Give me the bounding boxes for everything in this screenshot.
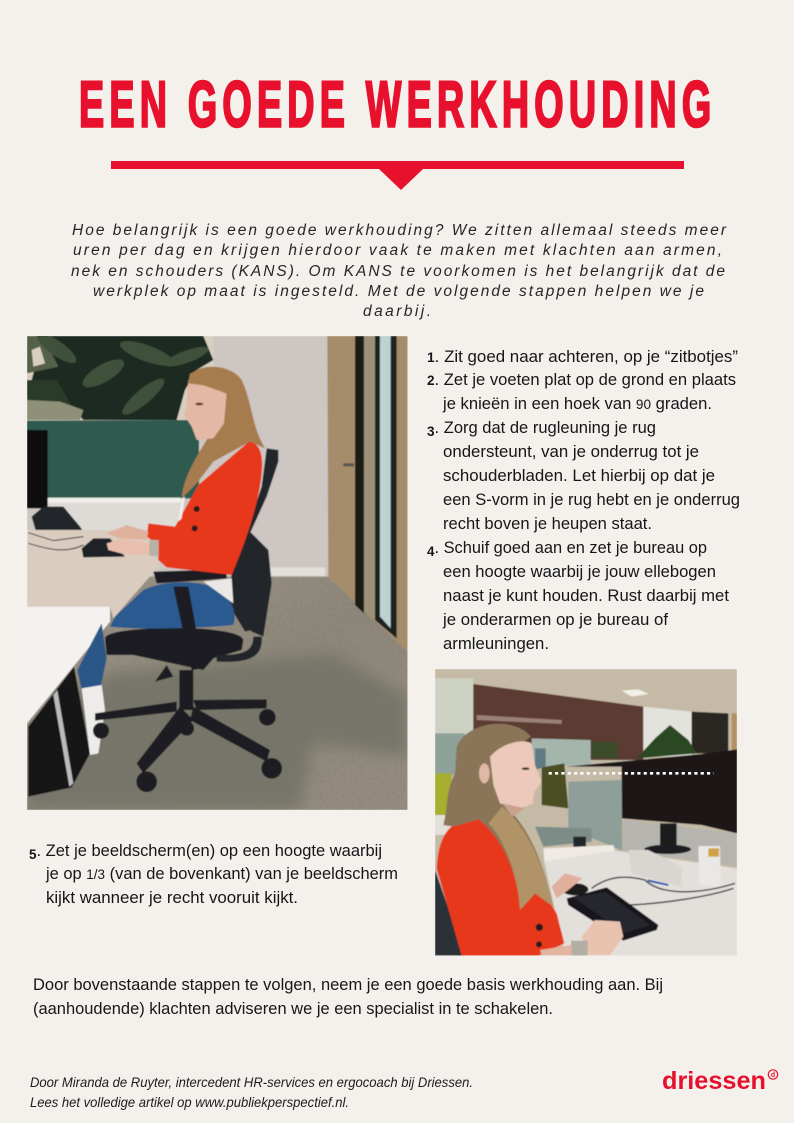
numbered steps 1 to 4: naast je kunt houden. Rust daarbij met [443,587,729,605]
white strip behind desk [47,502,181,530]
title divider with pointer [111,161,684,190]
neck shadow [502,803,525,817]
intro text: daarbij. [363,303,431,320]
numbered steps 1 to 4 [427,348,740,653]
numbered steps 1 to 4: je knieën in een hoek van 90 graden. [442,395,712,413]
numbered steps 1 to 4: 3 [427,424,435,439]
intro text: Hoe belangrijk is een goede werkhouding? We zitten allemaal steeds meer [72,222,727,239]
pc tower [28,667,90,797]
numbered steps 1 to 4: schouderbladen. Let hierbij op dat je [443,467,715,485]
numbered steps 1 to 4: Schuif goed aan en zet je bureau op [444,539,709,557]
desk [544,851,737,956]
numbered steps 1 to 4: Zorg dat de rugleuning je rug [444,419,656,437]
closing paragraph: Door bovenstaande stappen te volgen, neem je een goede basis werkhouding aan. Bij [33,976,663,994]
hair [182,367,265,498]
jacket [147,441,262,575]
white desk [27,607,110,723]
closing paragraph: (aanhoudende) klachten adviseren we je een specialist in te schakelen. [33,1000,553,1018]
numbered steps 1 to 4: een S-vorm in je rug hebt en je onderrug [443,491,740,509]
partitions [435,733,465,775]
jeans upper [110,582,235,628]
green panel [27,420,199,500]
intro text: werkplek op maat is ingesteld. Met de volgende stappen helpen we je [93,283,704,300]
armrest [153,569,227,670]
photo: woman looking at monitor [435,669,737,956]
jeans lower leg and shoe [77,623,107,690]
door panels [327,336,408,652]
numbered steps 1 to 4: een hoogte waarbij je jouw ellebogen [443,563,716,581]
numbered steps 1 to 4: armleuningen. [443,635,549,653]
step 5 text: je op 1/3 (van de bovenkant) van je beeldscherm [45,865,398,883]
intro text: nek en schouders (KANS). Om KANS te voorkomen is het belangrijk dat de [71,263,725,280]
numbered steps 1 to 4: . [435,419,439,437]
jacket [437,818,564,956]
chair seat [105,628,243,670]
cables [592,877,735,892]
numbered steps 1 to 4: ondersteunt, van je onderrug tot je [443,443,699,461]
numbered steps 1 to 4: 1. Zit goed naar achteren, op je “zitbotjes” [427,348,738,366]
back wall [435,678,473,735]
monitor [27,430,48,508]
numbered steps 1 to 4: 4 [427,544,435,559]
closing paragraph [33,976,663,1018]
hair [443,724,553,910]
chair back [217,448,278,662]
footer credit: Door Miranda de Ruyter, intercedent HR-services en ergocoach bij Driessen. [30,1074,473,1090]
logo: driessen: driessen [662,1067,766,1095]
small monitor [542,763,568,808]
plant [32,336,213,420]
numbered steps 1 to 4: je onderarmen op je bureau of [442,611,668,629]
step 5 text: 5 [29,847,37,862]
monitor row [567,749,737,833]
grey partition [568,780,622,851]
numbered steps 1 to 4: . [434,539,439,557]
logo: driessen: d [771,1072,775,1079]
acrylic stand and brochure [628,850,682,887]
hand on keyboard [582,920,623,955]
title: EEN GOEDE WERKHOUDING [79,69,711,141]
step 5 text: Zet je beeldscherm(en) op een hoogte waarbij [46,842,382,860]
desk [27,530,160,618]
step 5 text: . [37,842,41,860]
footer credit [30,1074,473,1110]
photo: woman seated at desk, side view [27,329,408,810]
step 5 text [29,842,398,907]
arms and hands [107,525,148,540]
chair back [435,870,465,956]
numbered steps 1 to 4: 2. Zet je voeten plat op de grond en plaats [427,371,736,389]
step 5 text: kijkt wanneer je recht vooruit kijkt. [46,889,298,907]
keyboard [567,887,658,941]
blouse [178,497,185,522]
dotted eye-level line [549,769,714,777]
mouse [562,883,588,895]
intro text: uren per dag en krijgen hierdoor vaak te maken met klachten aan armen, [73,242,722,259]
hand on mouse [552,873,582,898]
keyboard [82,538,125,557]
plant [637,725,697,758]
carpet [27,577,408,810]
footer credit: Lees het volledige artikel op www.publiekperspectief.nl. [30,1094,349,1110]
back stand and wall below monitors [623,820,737,867]
equipment left [535,827,592,847]
chair base [93,628,282,792]
intro text [71,222,727,320]
numbered steps 1 to 4: recht boven je heupen staat. [443,515,652,533]
face [490,741,542,809]
phone [31,506,82,531]
face [184,380,227,440]
